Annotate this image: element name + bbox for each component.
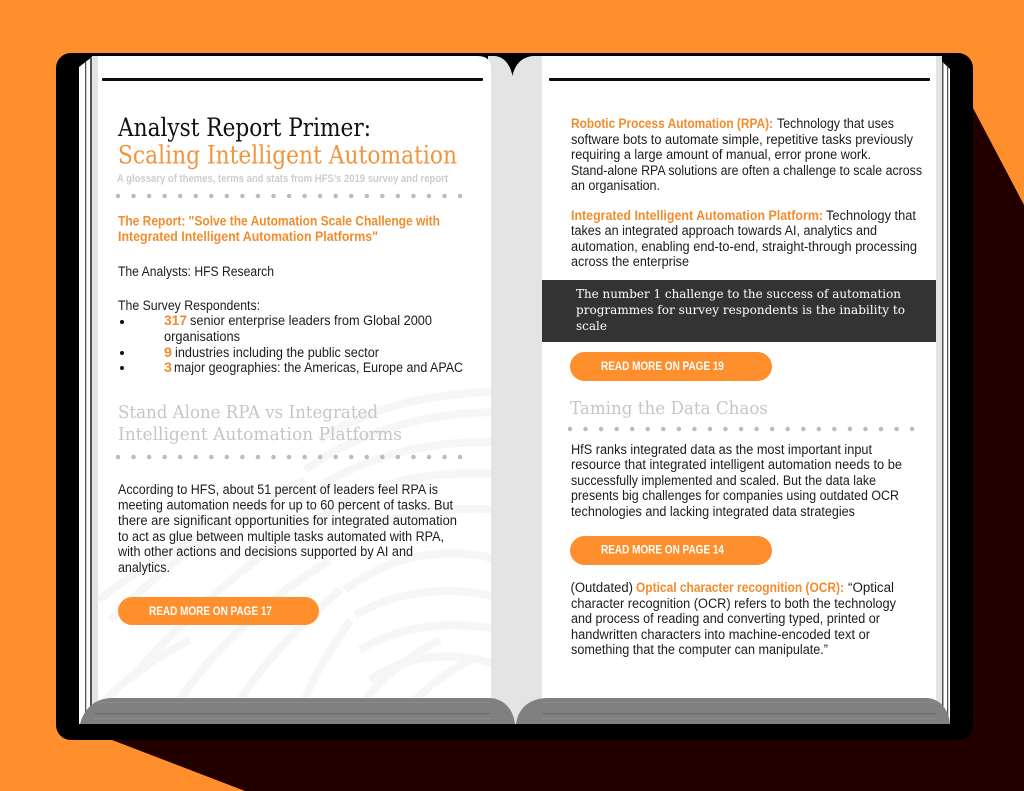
right page bbox=[542, 56, 936, 700]
OCR definition: handwritten characters into machine-encoded text or bbox=[571, 627, 870, 642]
right page stack bbox=[930, 56, 950, 724]
RPA paragraph: with other actions and decisions supported by AI and bbox=[117, 544, 413, 559]
RPA paragraph: meeting automation needs for up to 60 percent of tasks. But bbox=[118, 498, 453, 512]
RPA definition: requiring a large amount of manual, error prone work. bbox=[571, 147, 871, 162]
RPA definition: an organisation. bbox=[571, 178, 660, 193]
data chaos paragraph bbox=[571, 442, 902, 519]
RPA definition: Robotic Process Automation (RPA): bbox=[571, 116, 773, 131]
RPA paragraph: there are significant opportunities for integrated automation bbox=[118, 513, 457, 528]
RPA definition: software bots to automate simple, repetitive tasks previously bbox=[571, 132, 913, 147]
RPA definition bbox=[571, 116, 922, 193]
OCR definition bbox=[570, 580, 896, 657]
RPA definition: Stand-alone RPA solutions are often a challenge to scale across bbox=[571, 163, 922, 178]
palm leaf watermark bbox=[98, 392, 500, 700]
RPA paragraph: to act as glue between multiple tasks automated with RPA, bbox=[118, 529, 444, 544]
report name: The Report: "Solve the Automation Scale Challenge with bbox=[118, 214, 440, 228]
integrated platform definition: takes an integrated approach towards AI, analytics and bbox=[571, 223, 877, 238]
dotted divider bbox=[570, 427, 915, 431]
analysts: The Analysts: HFS Research bbox=[118, 264, 274, 279]
OCR definition: something that the computer can manipulate.” bbox=[571, 642, 828, 657]
OCR definition: “Optical bbox=[848, 580, 894, 595]
survey respondents: The Survey Respondents: bbox=[118, 298, 260, 313]
button: page 14 bbox=[570, 536, 772, 565]
button: page 19: READ MORE ON PAGE 19 bbox=[601, 361, 724, 373]
OCR definition: and process of reading and converting typed, printed or bbox=[571, 611, 880, 626]
callout bar: scale bbox=[576, 318, 607, 333]
survey respondents: 9 bbox=[164, 345, 172, 360]
book cover bbox=[56, 53, 973, 740]
button: page 14: READ MORE ON PAGE 14 bbox=[601, 544, 725, 556]
left bottom page edge bbox=[80, 698, 515, 724]
dotted divider bbox=[118, 194, 462, 198]
RPA paragraph bbox=[117, 482, 457, 575]
left page stack bbox=[79, 56, 100, 724]
subtitle: A glossary of themes, terms and stats from HFS’s 2019 survey and report bbox=[117, 173, 448, 185]
RPA definition: Technology that uses bbox=[777, 116, 894, 131]
right top rule bbox=[549, 78, 930, 81]
heading: stand alone RPA: Intelligent Automation Platforms bbox=[118, 424, 402, 445]
callout bar: programmes for survey respondents is the inability to bbox=[576, 302, 905, 317]
integrated platform definition: Integrated Intelligent Automation Platform: bbox=[571, 208, 823, 223]
OCR definition: Optical character recognition (OCR): bbox=[636, 580, 844, 595]
OCR definition: (Outdated) bbox=[570, 580, 633, 595]
button: page 19 bbox=[570, 352, 772, 381]
integrated platform definition: automation, enabling end-to-end, straight-through processing bbox=[571, 239, 917, 254]
RPA paragraph: analytics. bbox=[118, 560, 170, 575]
data chaos paragraph: presents big challenges for companies using outdated OCR bbox=[571, 488, 899, 503]
heading: stand alone RPA bbox=[118, 402, 402, 445]
left page title bbox=[117, 113, 457, 170]
integrated platform definition: across the enterprise bbox=[571, 254, 689, 269]
button: page 17: READ MORE ON PAGE 17 bbox=[149, 606, 272, 618]
data chaos paragraph: HfS ranks integrated data as the most important input bbox=[571, 442, 872, 457]
data chaos paragraph: technologies and lacking integrated data strategies bbox=[571, 504, 855, 519]
right bottom page edge bbox=[516, 698, 950, 724]
callout bar: The number 1 challenge to the success of automation bbox=[576, 286, 901, 301]
left page title: Scaling Intelligent Automation bbox=[118, 140, 457, 170]
survey respondents: senior enterprise leaders from Global 2000 bbox=[190, 313, 432, 328]
gutter notch bbox=[495, 53, 533, 76]
left page title: Analyst Report Primer: bbox=[117, 113, 371, 142]
book shadow bbox=[112, 85, 1024, 791]
callout bar bbox=[542, 280, 936, 342]
survey respondents: 3 bbox=[164, 360, 173, 375]
integrated platform definition bbox=[571, 208, 917, 269]
heading: data chaos: Taming the Data Chaos bbox=[570, 398, 768, 419]
left top rule bbox=[102, 78, 483, 81]
center gutter bbox=[488, 56, 545, 724]
survey respondents: industries including the public sector bbox=[175, 345, 379, 360]
survey respondents: major geographies: the Americas, Europe and APAC bbox=[174, 360, 463, 375]
data chaos paragraph: resource that integrated intelligent automation needs to be bbox=[571, 457, 902, 472]
data chaos paragraph: successfully implemented and scaled. But the data lake bbox=[571, 473, 876, 488]
report name bbox=[118, 214, 440, 244]
OCR definition: character recognition (OCR) refers to both the technology bbox=[571, 596, 896, 611]
survey respondents: 317 bbox=[164, 313, 187, 328]
integrated platform definition: Technology that bbox=[826, 208, 916, 223]
RPA paragraph: According to HFS, about 51 percent of leaders feel RPA is bbox=[118, 482, 438, 497]
report name: Integrated Intelligent Automation Platforms" bbox=[118, 229, 378, 244]
dotted divider bbox=[118, 455, 462, 459]
heading: stand alone RPA: Stand Alone RPA vs Integrated bbox=[118, 402, 378, 423]
left page bbox=[98, 56, 491, 700]
survey respondents: organisations bbox=[164, 329, 240, 344]
survey respondents bbox=[118, 298, 463, 375]
button: page 17 bbox=[118, 597, 319, 625]
